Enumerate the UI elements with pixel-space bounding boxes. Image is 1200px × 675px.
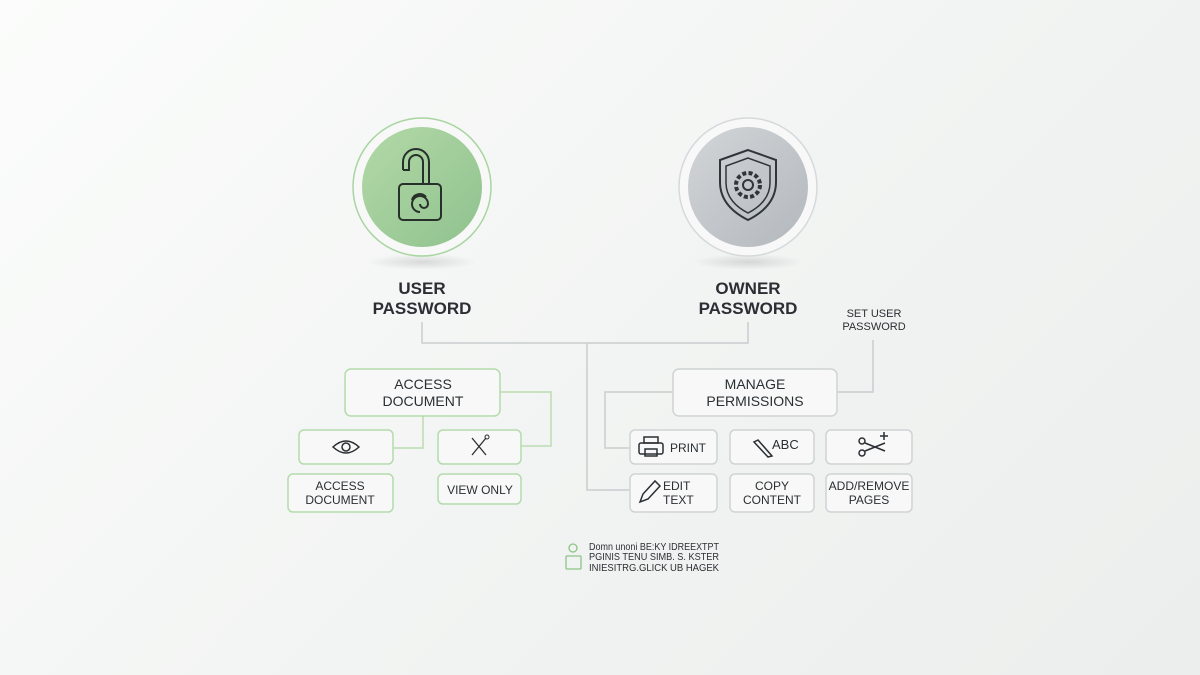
icon: owner password shield	[679, 118, 817, 270]
heading: user password: PASSWORD	[373, 299, 471, 318]
box: print: PRINT	[670, 441, 707, 455]
box: copy content	[730, 474, 814, 512]
box: manage permissions: PERMISSIONS	[706, 393, 804, 409]
box: edit text: TEXT	[663, 493, 694, 507]
footer note: Domn unoni BE:KY IDREEXTPT	[589, 542, 719, 553]
box: edit text: EDIT	[663, 479, 691, 493]
box: print	[630, 430, 717, 464]
heading: owner password: OWNER	[715, 279, 781, 298]
label: set user password	[842, 308, 906, 333]
box: access document: DOCUMENT	[383, 393, 464, 409]
box: access document (sub): ACCESS	[315, 479, 365, 493]
box: copy content: COPY	[755, 479, 789, 493]
heading: owner password	[699, 279, 797, 318]
box: ABC: ABC	[772, 437, 799, 452]
label: set user password: SET USER	[847, 308, 901, 320]
box: eye icon	[299, 430, 393, 464]
icon: user password lock	[353, 118, 491, 270]
footer note: PGINIS TENU SIMB. S. KSTER	[589, 552, 719, 563]
box: access document	[345, 369, 500, 416]
box: scissors	[826, 430, 912, 464]
box: access document: ACCESS	[394, 376, 452, 392]
box: view-only icon	[438, 430, 521, 464]
box: add/remove pages: PAGES	[849, 493, 889, 507]
box: copy content: CONTENT	[743, 493, 802, 507]
box: access document (sub): DOCUMENT	[305, 493, 375, 507]
box: manage permissions: MANAGE	[725, 376, 785, 392]
heading: user password: USER	[398, 279, 446, 298]
connector lines	[422, 322, 873, 490]
box: manage permissions	[673, 369, 837, 416]
box: view only: VIEW ONLY	[447, 483, 513, 497]
box: ABC	[730, 430, 814, 464]
label: set user password: PASSWORD	[842, 321, 906, 333]
box: add/remove pages: ADD/REMOVE	[829, 479, 909, 493]
box: access document (sub)	[288, 474, 393, 512]
heading: user password	[373, 279, 471, 318]
box: edit text	[630, 474, 717, 512]
footer note: INIESITRG.GLICK UB HAGEK	[589, 563, 719, 574]
box: view only	[438, 474, 521, 504]
heading: owner password: PASSWORD	[699, 299, 797, 318]
box: add/remove pages	[826, 474, 912, 512]
footer note	[566, 542, 719, 574]
